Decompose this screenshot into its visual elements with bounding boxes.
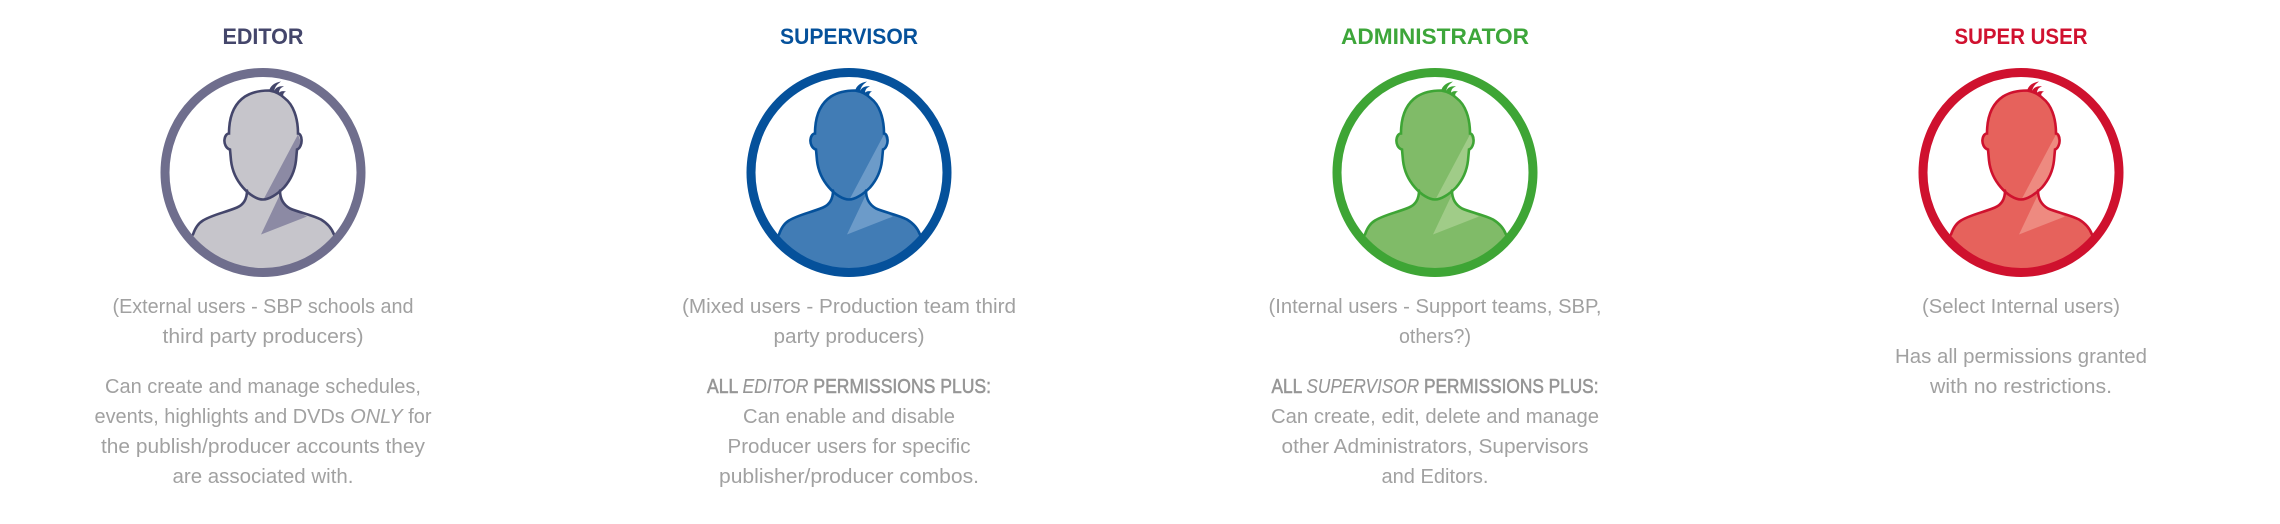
text: administrator permissions: and Editors. [1382,466,1488,488]
panel: super user [1895,24,2147,398]
text: administrator permissions: ALL SUPERVISOR PERMISSIONS PLUS: [1272,376,1598,398]
icon: super user avatar [1923,72,2119,274]
text: editor permissions: events, highlights and DVDs ONLY for [94,406,432,428]
text: administrator user type [1268,296,1602,348]
heading: supervisor: SUPERVISOR [780,24,918,49]
panel: administrator [1268,24,1602,488]
text: editor user type: third party producers) [162,326,364,348]
text: supervisor user type [682,296,1016,348]
text: supervisor permissions: Producer users for specific [728,436,970,458]
icon: editor avatar [165,72,361,274]
text: super user permissions: Has all permissions granted [1895,346,2147,368]
icon: supervisor avatar [751,72,947,274]
text: supervisor permissions: publisher/producer combos. [719,466,979,488]
heading: administrator: ADMINISTRATOR [1341,24,1529,49]
text: super user type: (Select Internal users) [1922,296,2120,318]
text: editor permissions: are associated with. [172,466,354,488]
panel: supervisor [682,24,1016,488]
text: editor user type [112,296,414,348]
text: super user permissions [1895,346,2147,398]
text: administrator permissions: Can create, edit, delete and manage [1271,406,1599,428]
text: editor permissions: the publish/producer accounts they [101,436,425,458]
text: editor permissions [94,376,432,488]
text: administrator user type: (Internal users - Support teams, SBP, [1268,296,1602,318]
text: supervisor permissions: Can enable and disable [743,406,955,428]
text: super user permissions: with no restrictions. [1929,376,2112,398]
text: editor permissions: Can create and manage schedules, [105,376,421,398]
text: editor user type: (External users - SBP schools and [112,296,414,318]
text: supervisor permissions [707,376,991,488]
text: supervisor permissions: ALL EDITOR PERMISSIONS PLUS: [707,376,991,398]
heading: super user: SUPER USER [1954,24,2088,49]
text: supervisor user type: party producers) [774,326,924,348]
text: administrator permissions [1271,376,1599,488]
text: administrator user type: others?) [1399,326,1471,348]
icon: administrator avatar [1337,72,1533,274]
heading: editor: EDITOR [222,24,304,49]
text: supervisor user type: (Mixed users - Production team third [682,296,1016,318]
text: administrator permissions: other Administrators, Supervisors [1282,436,1588,458]
panel: editor [94,24,432,488]
